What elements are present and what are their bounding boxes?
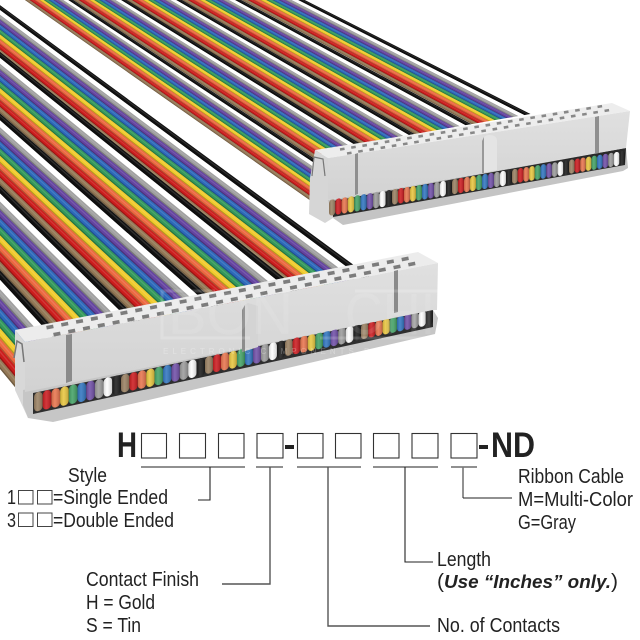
legend: style: 3 [7,510,16,532]
legend: length [437,549,618,593]
front connector [14,252,438,422]
bracket lines under code [141,467,512,626]
legend: style: =Single Ended [53,487,168,509]
legend: contact finish: Contact Finish [86,569,199,591]
legend: style [7,465,174,532]
legend: ribbon cable: M=Multi-Color [518,489,633,511]
legend: contact finish [86,569,199,637]
legend: length: Length [437,549,491,571]
legend: ribbon cable [518,466,633,534]
back connector [309,103,630,225]
legend: style: =Double Ended [53,510,174,532]
legend: contact finish: S = Tin [86,615,141,637]
legend: ribbon cable: G=Gray [518,512,576,534]
part number code [117,426,535,465]
watermark logo [162,282,470,356]
watermark logo: ELECTRONIC COMPONENTS DISTRIBUTOR [163,347,458,356]
legend: contact finish: H = Gold [86,592,155,614]
part number code: ND [491,426,535,465]
legend: style: Style [68,465,107,487]
legend: style: 1 [7,487,16,509]
legend: length: (Use “Inches” only. ) [437,571,618,593]
legend: number of contacts: No. of Contacts [437,615,560,637]
watermark logo: CHIP [345,282,470,347]
legend: ribbon cable: Ribbon Cable [518,466,624,488]
back ribbon cable [25,0,530,200]
part number code: H [117,426,137,465]
front ribbon cable [0,5,370,388]
watermark logo: BON [168,282,293,347]
